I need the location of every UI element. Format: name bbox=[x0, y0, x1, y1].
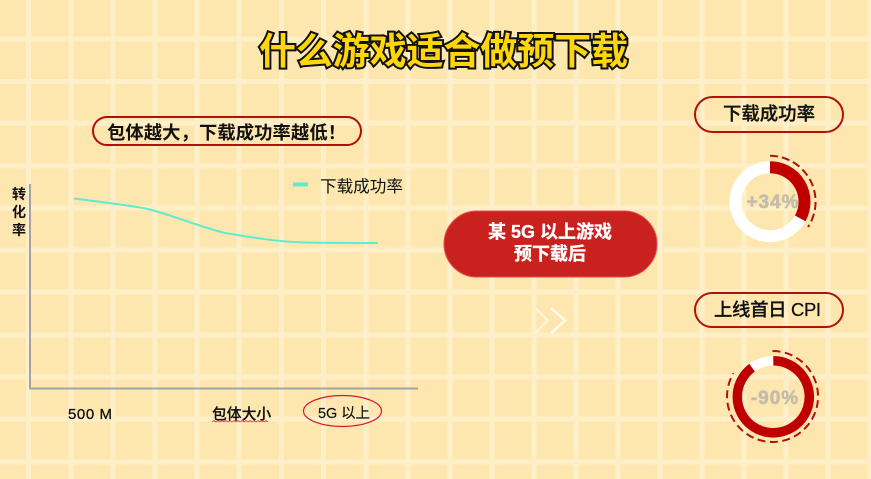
chart axes bbox=[30, 184, 418, 388]
callout button bbox=[444, 211, 657, 277]
line: download success rate bbox=[74, 198, 378, 243]
heading pill: larger package lower success bbox=[93, 117, 361, 145]
x label: 5G and above, circled: 5G 以上 bbox=[318, 405, 370, 422]
callout button: 某 5G 以上游戏 bbox=[488, 221, 612, 242]
arrow: double chevron bbox=[535, 308, 565, 333]
donut: -90%: -90% bbox=[751, 388, 799, 409]
donut: +34% bbox=[736, 156, 816, 236]
panel: first-day CPI bbox=[695, 293, 843, 442]
pill: first-day CPI: 上线首日 CPI bbox=[714, 299, 821, 320]
title: 什么游戏适合做预下载 bbox=[259, 31, 628, 72]
x label: 5G and above, circled bbox=[304, 396, 382, 426]
pill: first-day CPI bbox=[695, 293, 843, 327]
y axis label: 转 bbox=[12, 186, 26, 202]
y axis label: 率 bbox=[12, 222, 26, 238]
x label: package size: 包体大小 bbox=[212, 405, 271, 423]
pill: download success rate bbox=[695, 97, 843, 132]
donut: -90% bbox=[727, 351, 818, 442]
x label: 500 M: 500 M bbox=[68, 406, 112, 423]
callout button: 预下载后 bbox=[514, 244, 586, 264]
panel: download success rate bbox=[695, 97, 843, 236]
legend: 下载成功率 bbox=[320, 177, 403, 196]
panel: chart section bbox=[12, 117, 418, 426]
heading pill: larger package lower success: 包体越大，下载成功率越低！ bbox=[107, 122, 346, 143]
pill: download success rate: 下载成功率 bbox=[723, 103, 815, 124]
y axis label: 化 bbox=[12, 204, 26, 220]
donut: +34%: +34% bbox=[746, 192, 800, 213]
